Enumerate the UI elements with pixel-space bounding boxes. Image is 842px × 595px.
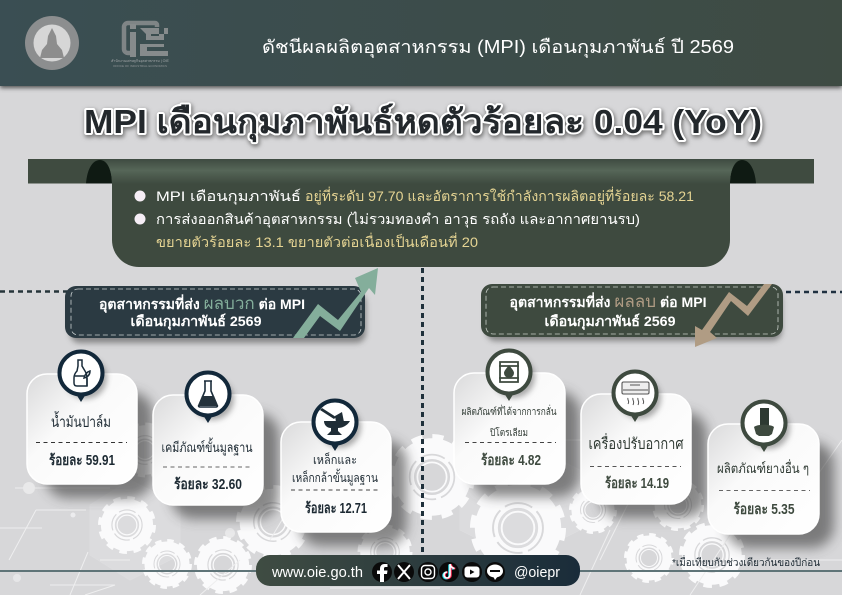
icon pin: flask — [186, 372, 234, 423]
negative impact badge: เดือนกุมภาพันธ์ 2569 — [544, 313, 676, 330]
icon: line — [485, 562, 505, 582]
card: iron and steel: ร้อยละ 12.71 — [305, 500, 367, 517]
card: refined petroleum — [454, 350, 580, 497]
bullet one: MPI เดือนกุมภาพันธ์ — [156, 188, 301, 205]
negative impact badge: อุตสาหกรรมที่ส่ง ผลลบ ต่อ MPI — [510, 292, 706, 311]
icon: youtube — [462, 562, 482, 582]
card: palm oil: ร้อยละ 59.91 — [49, 452, 115, 469]
card: air conditioners: เครื่องปรับอากาศ — [588, 433, 684, 453]
card: basic chemicals — [153, 372, 279, 519]
footer rule — [0, 570, 842, 572]
icon: X — [394, 562, 414, 582]
card: iron and steel — [281, 400, 407, 546]
ribbon summary panel — [28, 159, 814, 267]
logo: OIE: OFFICE OF INDUSTRIAL ECONOMICS — [113, 64, 167, 68]
card: iron and steel: เหล็กและ — [313, 452, 357, 467]
header bar — [0, 0, 842, 88]
card: air conditioners: ร้อยละ 14.19 — [605, 475, 669, 492]
icon pin: oil barrel — [488, 350, 535, 401]
header title: ดัชนีผลผลิตอุตสาหกรรม (MPI) เดือนกุมภาพันธ์ ปี 2569 — [262, 37, 734, 58]
icon pin: rubber tree — [742, 402, 790, 452]
icon: facebook — [372, 562, 392, 582]
bullet two — [134, 211, 640, 250]
card: basic chemicals: ร้อยละ 32.60 — [174, 476, 242, 493]
bullet one: อยู่ที่ระดับ 97.70 และอัตราการใช้กำลังการผลิตอยู่ที่ร้อยละ 58.21 — [305, 187, 694, 205]
positive impact badge: อุตสาหกรรมที่ส่ง ผลบวก ต่อ MPI — [99, 294, 305, 313]
card: refined petroleum: ปิโตรเลียม — [489, 426, 528, 439]
card: other rubber products — [708, 402, 834, 548]
footer contact pill — [256, 555, 580, 586]
bullet two: ขยายตัวร้อยละ 13.1 ขยายตัวต่อเนื่องเป็นเดือนที่ 20 — [156, 233, 478, 250]
arrow: upward trend — [293, 268, 378, 338]
icon: tiktok — [439, 562, 459, 582]
icon pin: anvil — [314, 400, 361, 451]
logo: OIE — [111, 23, 169, 68]
card: palm oil — [27, 352, 153, 498]
card: palm oil: น้ำมันปาล์ม — [51, 411, 111, 431]
logo: OIE: สำนักงานเศรษฐกิจอุตสาหกรรม | OIE — [111, 59, 169, 64]
logo: ministry seal — [25, 16, 79, 70]
card: basic chemicals: เคมีภัณฑ์ขั้นมูลฐาน — [162, 437, 252, 456]
card: iron and steel: เหล็กกล้าขั้นมูลฐาน — [292, 468, 378, 486]
main title: MPI เดือนกุมภาพันธ์หดตัวร้อยละ 0.04 (YoY) — [84, 103, 762, 143]
card: other rubber products: ร้อยละ 5.35 — [734, 501, 794, 518]
card: refined petroleum: ผลิตภัณฑ์ที่ได้จากการกลั่น — [462, 404, 557, 418]
card: air conditioners — [581, 372, 707, 518]
arrow: downward trend — [695, 284, 772, 347]
icon pin: bottle — [60, 352, 107, 402]
main title: MPI เดือนกุมภาพันธ์หดตัวร้อยละ 0.04 (YoY) — [85, 105, 763, 145]
background gears and circuit lines — [0, 426, 842, 595]
footer contact pill: @oiepr — [514, 564, 560, 581]
dashed connector lines — [0, 268, 842, 556]
card: other rubber products: ผลิตภัณฑ์ยางอื่น ๆ — [717, 459, 809, 476]
footer contact pill: www.oie.go.th — [271, 564, 363, 581]
positive impact badge: เดือนกุมภาพันธ์ 2569 — [130, 313, 262, 330]
bullet two: การส่งออกสินค้าอุตสาหกรรม (ไม่รวมทองคำ อาวุธ รถถัง และอากาศยานรบ) — [156, 211, 640, 228]
card: refined petroleum: ร้อยละ 4.82 — [481, 452, 541, 469]
icon: instagram — [418, 562, 438, 582]
bullet one — [134, 187, 694, 205]
negative impact badge — [481, 284, 783, 347]
footnote: *เมื่อเทียบกับช่วงเดียวกันของปีก่อน — [672, 555, 820, 569]
positive impact badge — [65, 268, 378, 343]
icon pin: air conditioner — [614, 372, 661, 422]
